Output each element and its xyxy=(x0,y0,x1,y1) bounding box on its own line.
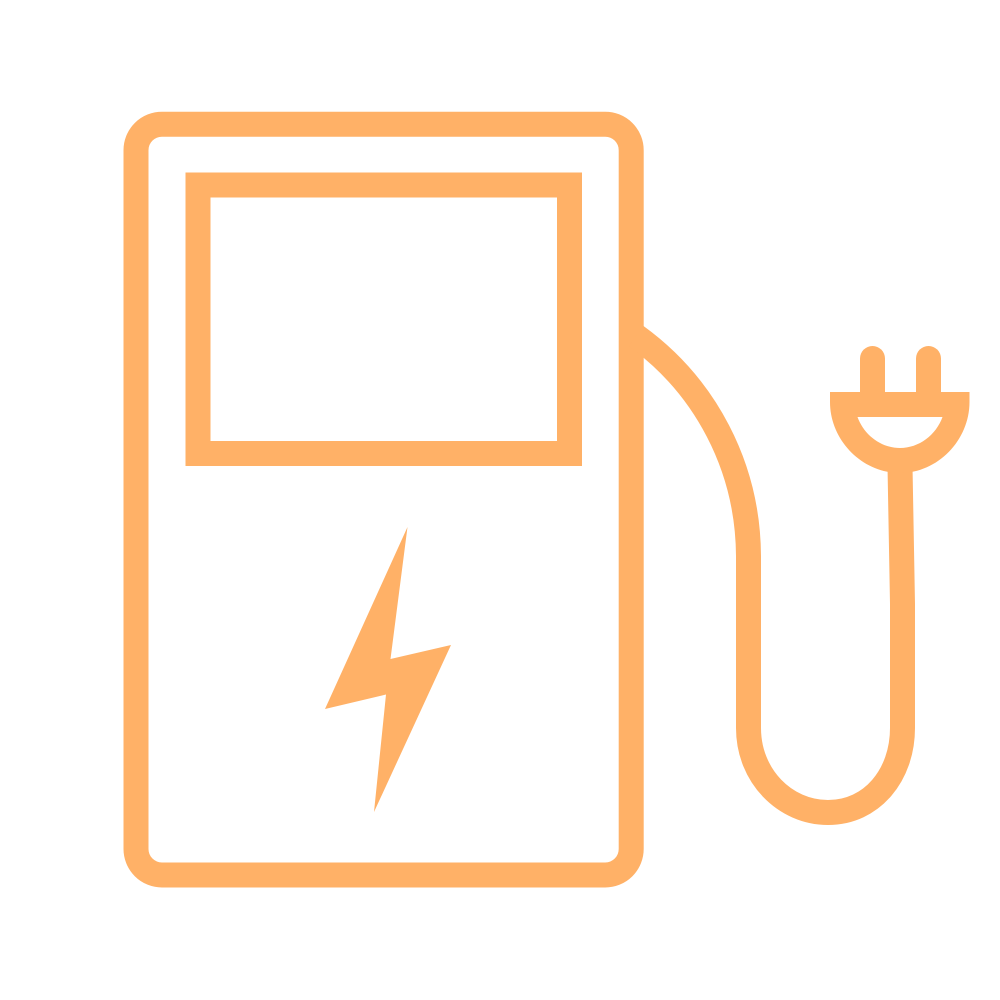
plug prong right xyxy=(916,358,941,400)
charging cable xyxy=(636,336,902,812)
plug head xyxy=(830,392,970,473)
plug prong left xyxy=(860,358,885,400)
display screen xyxy=(198,185,570,454)
lightning bolt xyxy=(325,527,451,812)
plug xyxy=(830,358,970,473)
charging station body xyxy=(136,124,631,875)
